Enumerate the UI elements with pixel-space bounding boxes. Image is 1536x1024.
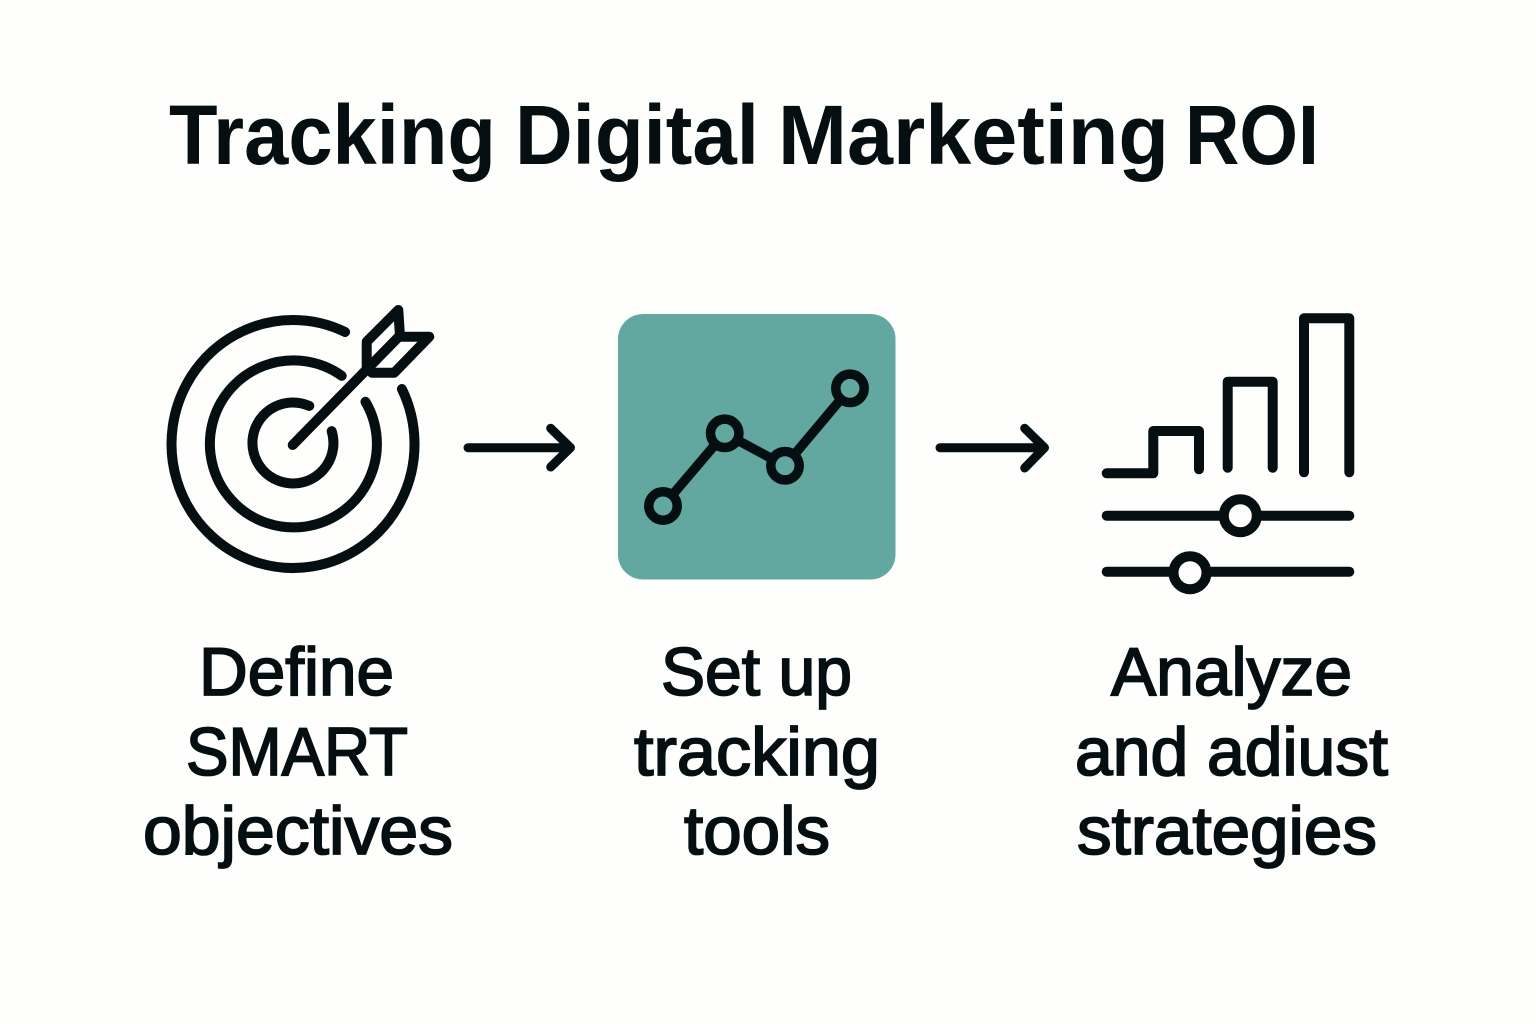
label: analyze and adiust strategies: Analyze <box>1111 634 1352 710</box>
title: Tracking <box>169 88 496 182</box>
outer target ring <box>172 320 415 568</box>
middle target ring <box>210 360 377 527</box>
teal rounded square <box>618 314 896 580</box>
inner target ring <box>252 402 333 483</box>
label: define SMART objectives <box>143 634 453 869</box>
icon: bars and sliders <box>1107 318 1349 589</box>
label: define SMART objectives: objectives <box>143 793 453 869</box>
label: analyze and adiust strategies <box>1075 634 1388 869</box>
line chart <box>649 374 864 520</box>
title <box>169 88 1319 182</box>
bar 2 <box>1228 382 1273 468</box>
panel: tracking tools icon <box>618 314 896 580</box>
title: Digital <box>515 88 759 182</box>
label: define SMART objectives: Define <box>199 634 394 710</box>
slider 2 <box>1107 556 1349 589</box>
bar 3 <box>1304 318 1349 472</box>
label: analyze and adiust strategies: and adiust <box>1075 714 1388 790</box>
slider 1 <box>1107 499 1349 532</box>
label: analyze and adiust strategies: strategies <box>1077 793 1377 869</box>
icon: target with arrow <box>172 310 429 568</box>
title: Marketing <box>778 88 1169 182</box>
arrow shaft <box>293 336 399 445</box>
arrow fletching <box>367 310 429 373</box>
title: ROI <box>1185 88 1319 182</box>
label: set up tracking tools: tools <box>684 793 830 869</box>
label: set up tracking tools <box>634 634 880 869</box>
bar 1 <box>1107 431 1199 473</box>
label: set up tracking tools: Set up <box>661 634 852 710</box>
arrow: step 2 to step 3 <box>940 428 1044 468</box>
label: set up tracking tools: tracking <box>634 714 880 790</box>
label: define SMART objectives: SMART <box>186 714 408 790</box>
arrow: step 1 to step 2 <box>468 428 570 467</box>
